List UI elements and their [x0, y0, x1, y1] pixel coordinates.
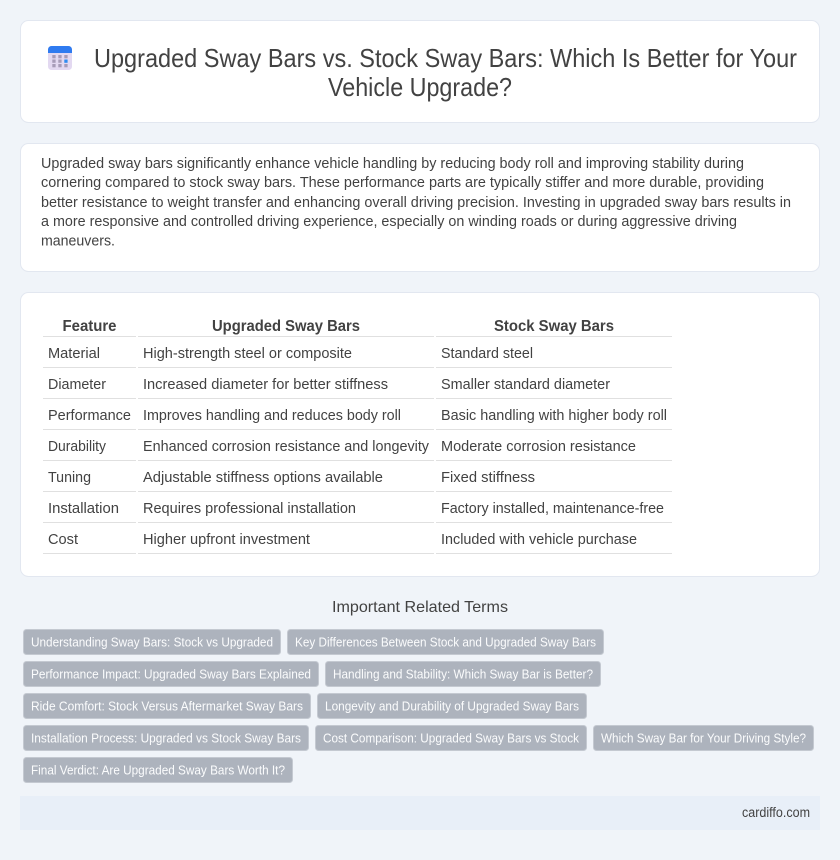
chip: Longevity and Durability of Upgraded Sway Bars — [325, 698, 579, 714]
intro paragraph — [41, 155, 791, 250]
row: diameter: Increased diameter for better stiffness — [143, 376, 388, 393]
chip — [288, 630, 604, 654]
chip — [594, 726, 814, 750]
row: durability: Moderate corrosion resistance — [441, 438, 636, 455]
row: cost — [48, 531, 637, 548]
row: performance: Basic handling with higher body roll — [441, 407, 667, 424]
heading: important related terms: Important Related Terms — [332, 599, 508, 616]
table header: Stock Sway Bars — [494, 318, 614, 335]
chip — [24, 662, 318, 686]
row: installation: Factory installed, maintenance-free — [441, 500, 664, 517]
chip — [316, 726, 586, 750]
panel: comparison table — [20, 292, 820, 576]
chip: Final Verdict: Are Upgraded Sway Bars Worth It? — [31, 762, 285, 778]
row: tuning: Adjustable stiffness options available — [143, 469, 383, 486]
row: cost: Included with vehicle purchase — [441, 531, 637, 548]
chip: Cost Comparison: Upgraded Sway Bars vs Stock — [323, 730, 579, 746]
row: performance: Performance — [48, 407, 131, 424]
chip: Understanding Sway Bars: Stock vs Upgraded — [31, 634, 273, 650]
chip — [24, 726, 308, 750]
table header: Upgraded Sway Bars — [212, 318, 360, 335]
intro paragraph: Upgraded sway bars significantly enhance vehicle handling by reducing body roll and improving stability during — [41, 155, 744, 172]
chip — [326, 662, 600, 686]
row: material: Standard steel — [441, 345, 533, 362]
row: durability — [48, 438, 636, 455]
row: durability: Durability — [48, 438, 106, 455]
chip: Which Sway Bar for Your Driving Style? — [601, 730, 806, 746]
related term chips — [24, 630, 814, 782]
panel: title header — [20, 20, 820, 122]
footer bar — [20, 796, 820, 830]
row: tuning: Fixed stiffness — [441, 469, 535, 486]
chip: Ride Comfort: Stock Versus Aftermarket Sway Bars — [31, 698, 303, 714]
row: tuning — [48, 469, 535, 486]
row: installation — [48, 500, 664, 517]
chip — [24, 758, 292, 782]
chip — [318, 694, 586, 718]
table header: Feature — [62, 318, 117, 335]
row: cost: Higher upfront investment — [143, 531, 311, 548]
row: installation: Requires professional installation — [143, 500, 356, 517]
panel: introduction — [20, 144, 820, 272]
row: tuning: Tuning — [48, 469, 91, 486]
table header — [62, 318, 614, 335]
row: material — [48, 345, 533, 362]
row: cost: Cost — [48, 531, 79, 548]
row: diameter: Smaller standard diameter — [441, 376, 610, 393]
intro paragraph: maneuvers. — [41, 232, 115, 250]
chip: Key Differences Between Stock and Upgraded Sway Bars — [295, 634, 596, 650]
row: performance: Improves handling and reduces body roll — [143, 407, 401, 424]
row: performance — [48, 407, 667, 424]
chip — [24, 694, 310, 718]
intro paragraph: better resistance to weight transfer and enhancing overall driving precision. Investing in upgraded sway bars results in — [41, 194, 791, 211]
row: material: High-strength steel or composite — [143, 345, 352, 362]
icon: calendar — [48, 46, 72, 70]
intro paragraph: cornering compared to stock sway bars. These performance parts are typically stiffer and more durable, providing — [41, 174, 764, 191]
chip: Performance Impact: Upgraded Sway Bars Explained — [31, 666, 311, 682]
row: material: Material — [48, 345, 100, 362]
chip: Handling and Stability: Which Sway Bar is Better? — [333, 666, 593, 682]
row: diameter — [48, 376, 610, 393]
row: diameter: Diameter — [48, 376, 106, 393]
chip — [24, 630, 280, 654]
title — [94, 43, 797, 102]
footer site name: cardiffo.com — [742, 805, 810, 820]
intro paragraph: a more responsive and controlled driving experience, especially on winding roads or during aggressive driving — [41, 213, 737, 230]
row: durability: Enhanced corrosion resistance and longevity — [143, 438, 429, 455]
chip: Installation Process: Upgraded vs Stock Sway Bars — [31, 730, 301, 746]
row: installation: Installation — [48, 500, 119, 517]
title: Vehicle Upgrade? — [328, 72, 512, 102]
